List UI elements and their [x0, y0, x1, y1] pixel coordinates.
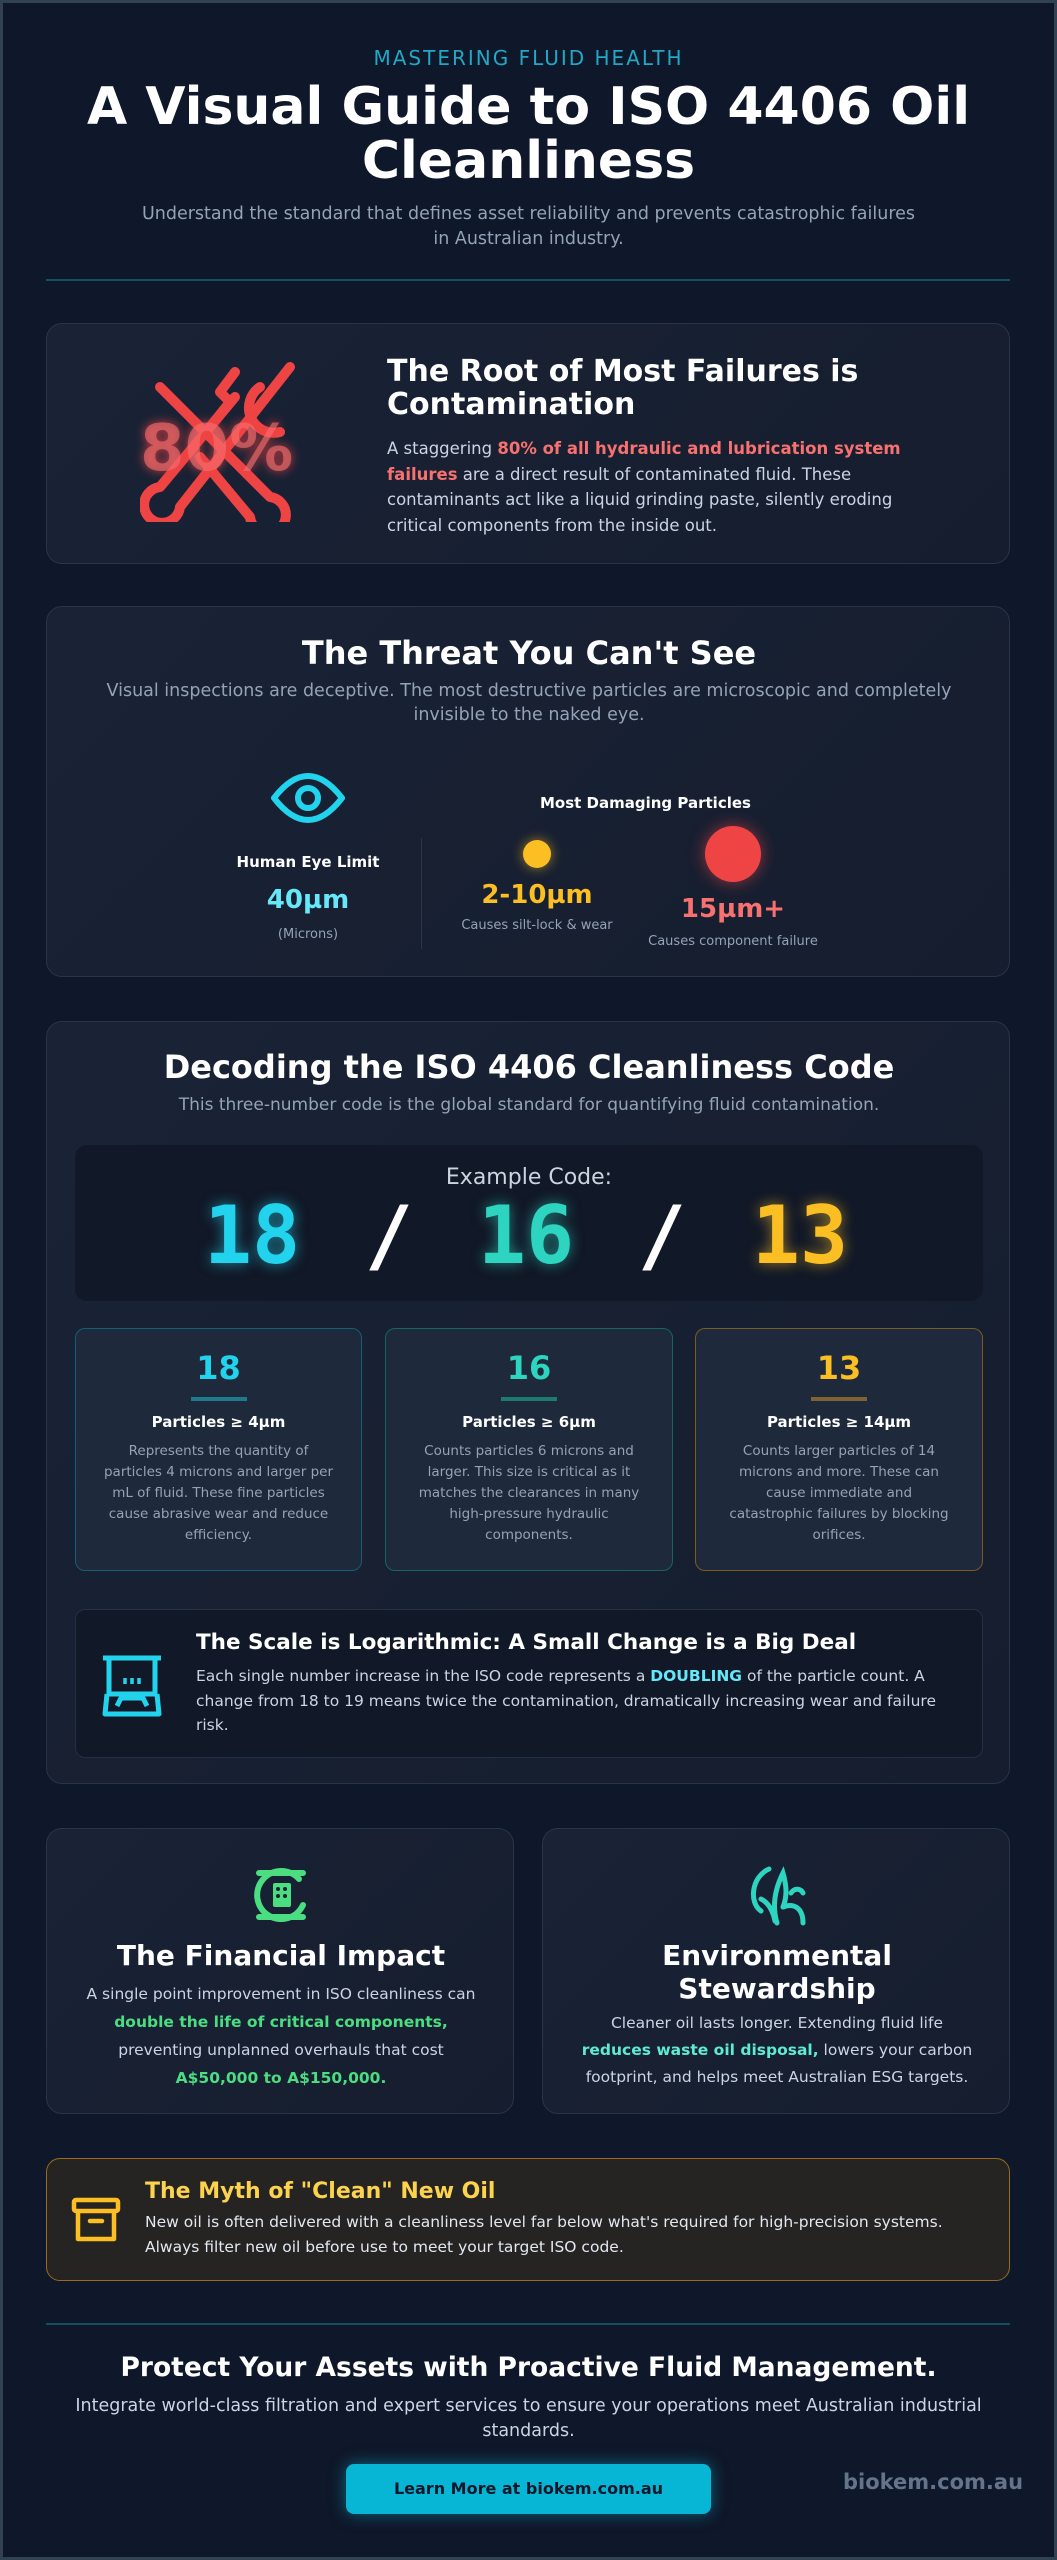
particle: 15um+: Causes component failure — [648, 934, 818, 949]
code card: 18: Particles ≥ 4µm — [152, 1413, 285, 1431]
icon: money — [254, 1868, 306, 1922]
CTA button: Learn More at biokem.com.au — [394, 2479, 663, 2498]
code card: 18: 18 — [196, 1349, 241, 1387]
heading: Contamination — [387, 387, 635, 422]
eye limit stat: 40µm — [267, 885, 349, 915]
panel: financial impact — [46, 1828, 514, 2114]
subtitle: Understand the standard that defines asset reliability and prevents catastrophic failures — [142, 204, 915, 224]
panel: root cause — [46, 323, 1010, 564]
body — [145, 2213, 943, 2256]
CTA subtext: Integrate world-class filtration and expert services to ensure your operations meet Australian industrial standards. — [75, 2396, 982, 2441]
code card: 18 — [75, 1328, 362, 1571]
CTA button — [346, 2464, 711, 2514]
body: A single point improvement in ISO cleanliness can double the life of critical components, preventing unplanned overhauls that cost A$50,000 to A$150,000. — [87, 1985, 475, 2087]
icon: crossed tools with 80% — [137, 362, 298, 522]
particle: 15um+: 15µm+ — [681, 894, 785, 924]
heading: Decoding the ISO 4406 Cleanliness Code — [164, 1048, 894, 1086]
heading — [662, 1939, 892, 2005]
callout: logarithmic scale — [75, 1609, 983, 1758]
damaging particles label: Most Damaging Particles — [540, 794, 751, 812]
body: footprint, and helps meet Australian ESG targets. — [586, 2068, 968, 2086]
body — [582, 2014, 972, 2086]
body: Cleaner oil lasts longer. Extending fluid life — [611, 2014, 943, 2032]
example code box: / — [365, 1189, 413, 1282]
title: A Visual Guide to ISO 4406 Oil — [87, 77, 970, 137]
heading: The Scale is Logarithmic: A Small Change is a Big Deal — [196, 1630, 856, 1655]
heading: Environmental — [662, 1939, 892, 1972]
body: reduces waste oil disposal, lowers your carbon — [582, 2041, 972, 2059]
icon: box — [72, 2198, 120, 2242]
eye limit stat: (Microns) — [278, 927, 338, 942]
icon: beaker — [102, 1656, 162, 1716]
title — [87, 77, 970, 191]
example code box: 16 — [478, 1189, 574, 1282]
eye limit stat — [237, 853, 380, 942]
subtitle: in Australian industry. — [433, 229, 624, 249]
icon: leaf — [750, 1866, 806, 1926]
CTA heading: Protect Your Assets with Proactive Fluid Management. — [120, 2352, 937, 2383]
particle: 15um+ — [648, 815, 818, 949]
code card: 18: Represents the quantity of particles 4 microns and larger per mL of fluid. These fine particles cause abrasive wear and reduce efficiency. — [104, 1443, 333, 1543]
code card: 16: Counts particles 6 microns and larger. This size is critical as it matches the clearances in many high-pressure hydraulic components. — [419, 1443, 639, 1543]
panel: threat — [46, 606, 1010, 977]
code card: 16: Particles ≥ 6µm — [462, 1413, 596, 1431]
footer brand: biokem.com.au — [843, 2470, 1023, 2494]
code card: 13: 13 — [817, 1349, 861, 1387]
particle: 2-10um: 2-10µm — [481, 880, 593, 910]
code card: 13 — [695, 1328, 983, 1571]
icon: eye — [270, 773, 346, 823]
code card: 16 — [385, 1328, 673, 1571]
heading: Stewardship — [678, 1972, 876, 2005]
example code box — [75, 1145, 983, 1301]
body: Each single number increase in the ISO code represents a DOUBLING of the particle count. A change from 18 to 19 means twice the contamination, dramatically increasing wear and failure risk. — [196, 1667, 936, 1734]
subtext: invisible to the naked eye. — [413, 705, 645, 725]
subtitle — [142, 204, 915, 249]
particle: 2-10um: Causes silt-lock & wear — [461, 918, 613, 933]
heading — [387, 354, 858, 422]
body text: A staggering 80% of all hydraulic and lubrication system failures are a direct result of contaminated fluid. These contaminants act like a liquid grinding paste, silently eroding critical components from the inside out. — [387, 439, 901, 534]
body: New oil is often delivered with a cleanliness level far below what's required for high-precision systems. — [145, 2213, 943, 2231]
example code box: / — [638, 1189, 686, 1282]
callout: myth of clean new oil — [46, 2158, 1010, 2281]
heading: The Myth of "Clean" New Oil — [145, 2179, 495, 2204]
example code box: 13 — [752, 1189, 848, 1282]
heading: The Threat You Can't See — [302, 634, 756, 672]
eyebrow: MASTERING FLUID HEALTH — [373, 46, 684, 70]
title: Cleanliness — [362, 131, 695, 191]
subtext: This three-number code is the global standard for quantifying fluid contamination. — [179, 1095, 879, 1115]
subtext — [106, 681, 952, 725]
code card: 16: 16 — [507, 1349, 551, 1387]
example code box: Example Code: — [446, 1165, 612, 1190]
panel: environmental — [542, 1828, 1010, 2114]
body: Always filter new oil before use to meet your target ISO code. — [145, 2238, 624, 2256]
panel: decoding ISO code — [46, 1021, 1010, 1784]
particle: 2-10um — [461, 832, 613, 933]
example code box: 18 — [204, 1189, 300, 1282]
code card: 13: Particles ≥ 14µm — [767, 1413, 911, 1431]
eye limit stat: Human Eye Limit — [237, 853, 379, 871]
heading: The Root of Most Failures is — [387, 354, 858, 389]
code card: 13: Counts larger particles of 14 microns and more. These can cause immediate and catastrophic failures by blocking orifices. — [729, 1443, 949, 1543]
icon: crossed tools with 80%: 80% — [140, 412, 293, 486]
heading: The Financial Impact — [117, 1939, 445, 1972]
subtext: Visual inspections are deceptive. The most destructive particles are microscopic and completely — [106, 681, 952, 701]
